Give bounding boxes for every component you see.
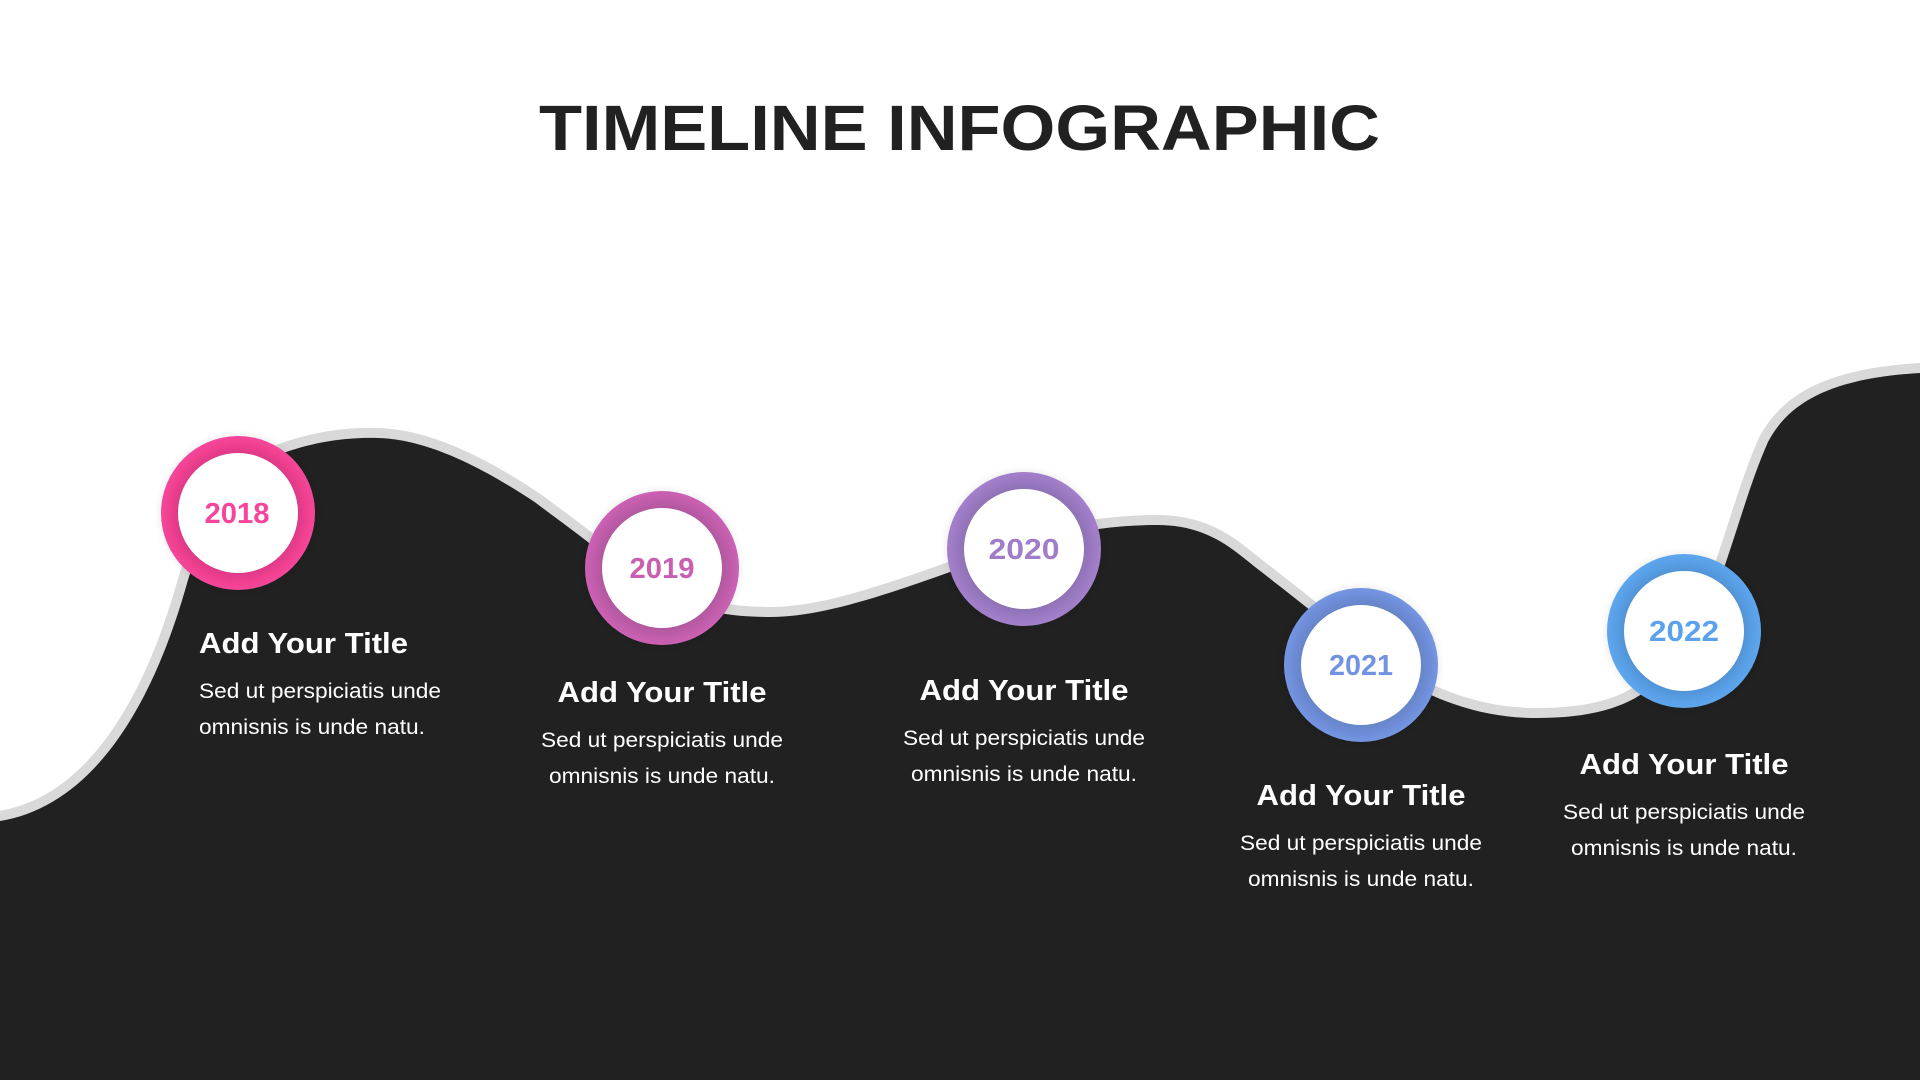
- text block 2022: Sed ut perspiciatis unde: [1563, 800, 1805, 824]
- text block 2020: Sed ut perspiciatis unde: [903, 726, 1145, 750]
- wave: dark hill with grey outline: [0, 371, 1920, 1080]
- text block 2018: [199, 628, 441, 739]
- text block 2021: Sed ut perspiciatis unde: [1240, 831, 1482, 855]
- text block 2018: omnisnis is unde natu.: [199, 715, 425, 739]
- text block 2019: [541, 677, 783, 788]
- text block 2022: omnisnis is unde natu.: [1571, 836, 1797, 860]
- text block 2020: [903, 675, 1145, 786]
- milestone 2021: [1283, 587, 1439, 743]
- text block 2019: Add Your Title: [558, 677, 766, 709]
- milestone 2018: [160, 435, 316, 591]
- text block 2020: Add Your Title: [920, 675, 1128, 707]
- text block 2021: Add Your Title: [1256, 780, 1466, 812]
- text block 2022: [1563, 749, 1805, 860]
- text block 2020: omnisnis is unde natu.: [911, 762, 1137, 786]
- title: TIMELINE INFOGRAPHIC: [539, 92, 1380, 164]
- text block 2021: omnisnis is unde natu.: [1248, 867, 1474, 891]
- milestone 2020: 2020: [988, 534, 1060, 566]
- milestone 2021: 2021: [1329, 650, 1393, 682]
- milestone 2022: [1606, 553, 1762, 709]
- milestone 2019: [584, 490, 740, 646]
- text block 2018: Add Your Title: [199, 628, 408, 660]
- milestone 2018: 2018: [204, 498, 270, 530]
- milestone 2019: 2019: [630, 553, 694, 585]
- text block 2018: Sed ut perspiciatis unde: [199, 679, 441, 703]
- text block 2019: Sed ut perspiciatis unde: [541, 728, 783, 752]
- text block 2021: [1240, 780, 1482, 891]
- text block 2019: omnisnis is unde natu.: [549, 764, 775, 788]
- milestone 2022: 2022: [1649, 616, 1719, 648]
- text block 2022: Add Your Title: [1580, 749, 1788, 781]
- milestone 2020: [946, 471, 1102, 627]
